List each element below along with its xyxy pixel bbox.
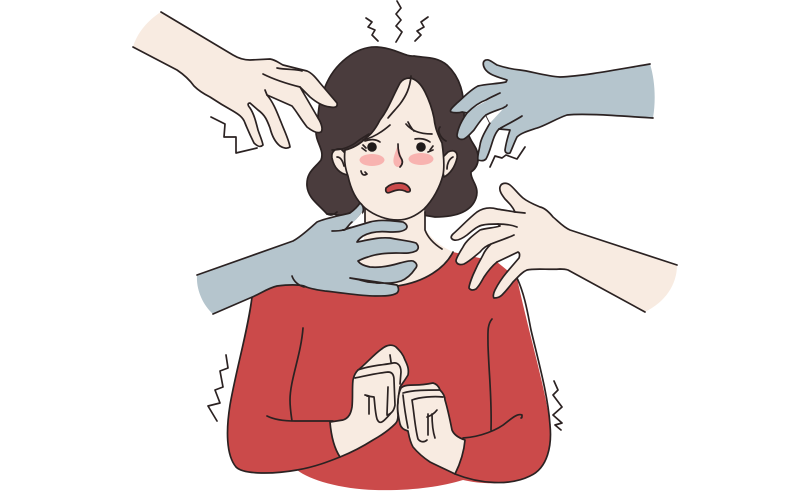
clasped right fist bbox=[398, 383, 465, 474]
left sleeve crease bbox=[267, 328, 333, 421]
nose bbox=[393, 144, 403, 167]
right eye bbox=[415, 139, 433, 152]
open mouth bbox=[386, 183, 410, 193]
woman's right ear bbox=[440, 151, 457, 177]
red sweater bbox=[228, 252, 550, 490]
hand: lower left blue hand bbox=[197, 203, 418, 314]
shaking mark: by upper right hand bbox=[490, 147, 525, 167]
shaking mark: by upper left hand bbox=[211, 117, 257, 153]
face bbox=[332, 76, 446, 220]
right eyebrow bbox=[406, 122, 432, 134]
hand: upper left cream hand bbox=[133, 12, 337, 148]
woman's left ear bbox=[332, 149, 352, 175]
hand: lower right cream hand bbox=[451, 183, 677, 312]
sweat drop bbox=[361, 171, 367, 175]
shaking mark: left of sweater bbox=[208, 355, 228, 421]
left eye bbox=[362, 140, 380, 152]
right sleeve crease bbox=[463, 319, 522, 438]
hair strand across forehead bbox=[388, 76, 411, 118]
left eyebrow bbox=[363, 125, 390, 140]
shaking marks: above head bbox=[366, 1, 428, 42]
shaking mark: right of sweater bbox=[553, 381, 562, 430]
finger creases bbox=[263, 68, 302, 95]
finger gaps bbox=[470, 94, 499, 110]
thumb crease bbox=[292, 276, 304, 287]
gap revealing sweater bbox=[360, 280, 380, 283]
hand: upper right blue hand bbox=[450, 60, 655, 161]
woman's neck and chest skin bbox=[350, 205, 453, 288]
white gap above shoulder bbox=[498, 253, 519, 270]
woman's hair bbox=[307, 47, 478, 217]
white gap by thumb bbox=[344, 212, 363, 229]
blush cheeks bbox=[360, 153, 434, 166]
clasped left fist bbox=[330, 345, 408, 457]
